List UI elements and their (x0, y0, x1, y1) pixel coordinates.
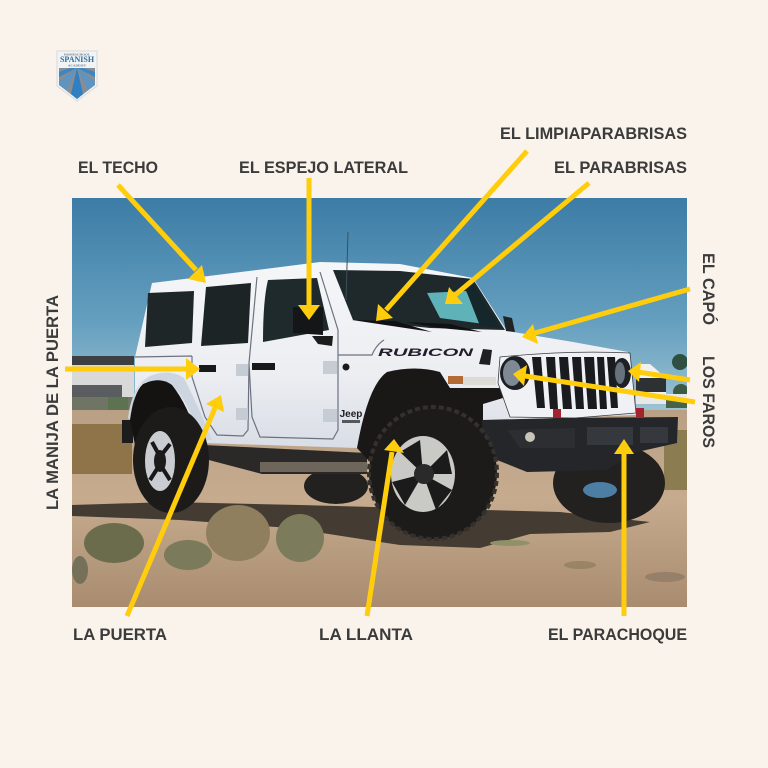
left headlight (500, 356, 530, 390)
arrow: el parabrisas (445, 183, 589, 304)
photo: white Jeep in the desert (72, 198, 689, 607)
arrow: el techo (118, 185, 206, 283)
logo: Spanish academy shield: HOMESCHOOL (64, 52, 91, 56)
tow hooks (553, 409, 561, 419)
door handles (199, 363, 275, 372)
rear quarter window (145, 291, 194, 347)
turn signal and marker (448, 376, 463, 384)
rear door window (201, 283, 251, 346)
door seams (135, 272, 384, 439)
arrow: el capó (522, 289, 690, 344)
label: la manija de la puerta: LA MANIJA DE LA PUERTA (44, 295, 62, 510)
RUBICON lettering: RUBICON (378, 347, 475, 359)
ground (72, 410, 687, 607)
hood vent (479, 349, 492, 365)
front wheel (369, 407, 497, 539)
rear wheel (133, 407, 209, 513)
arrow: el limpiaparabrisas (376, 151, 527, 321)
bumper (482, 417, 678, 472)
arrow: los faros izquierdo (513, 365, 695, 402)
far mirror (503, 316, 515, 332)
label: los faros: LOS FAROS (699, 356, 717, 448)
wipers (352, 320, 432, 332)
label: la puerta: LA PUERTA (73, 626, 167, 644)
label: el techo: EL TECHO (78, 159, 158, 177)
label: el espejo lateral: EL ESPEJO LATERAL (239, 159, 408, 177)
antenna (346, 232, 348, 300)
background buildings and palm trees (72, 354, 689, 415)
underbody and running board (203, 445, 367, 474)
arrow: el parachoque (614, 439, 634, 616)
rear bumper (122, 420, 133, 443)
shadow (72, 502, 650, 548)
label: la llanta: LA LLANTA (319, 626, 413, 644)
arrow: la llanta (367, 439, 404, 616)
rear arch (130, 380, 188, 444)
arrow: el espejo lateral (298, 178, 320, 320)
hinges (236, 361, 337, 422)
shrubs (72, 505, 685, 584)
front arch and flare (357, 368, 503, 462)
right headlight (615, 358, 631, 388)
arrow: la puerta (127, 395, 224, 616)
rear and cabin (135, 262, 636, 448)
grille slats (532, 357, 618, 409)
dry grass (72, 424, 687, 490)
windshield (333, 270, 505, 330)
grille surround (498, 352, 636, 418)
label: el capó: EL CAPÓ (699, 253, 718, 325)
label: el parabrisas: EL PARABRISAS (554, 159, 687, 177)
jeep body (122, 262, 678, 472)
Jeep badge: Jeep (340, 409, 362, 420)
arrow: los faros derecho (628, 362, 690, 382)
sky (72, 198, 687, 423)
front door window (263, 278, 329, 342)
side mirror (293, 307, 323, 335)
label: el parachoque: EL PARACHOQUE (548, 626, 687, 644)
logo: Spanish academy shield: SPANISH (60, 55, 95, 64)
far side tires (304, 443, 665, 523)
logo: Spanish academy shield: ACADEMY (68, 64, 87, 68)
logo: Spanish academy shield (57, 51, 97, 101)
label: el limpiaparabrisas: EL LIMPIAPARABRISAS (500, 125, 687, 143)
rear fender flare (128, 372, 212, 440)
arrow: la manija de la puerta (65, 358, 200, 380)
